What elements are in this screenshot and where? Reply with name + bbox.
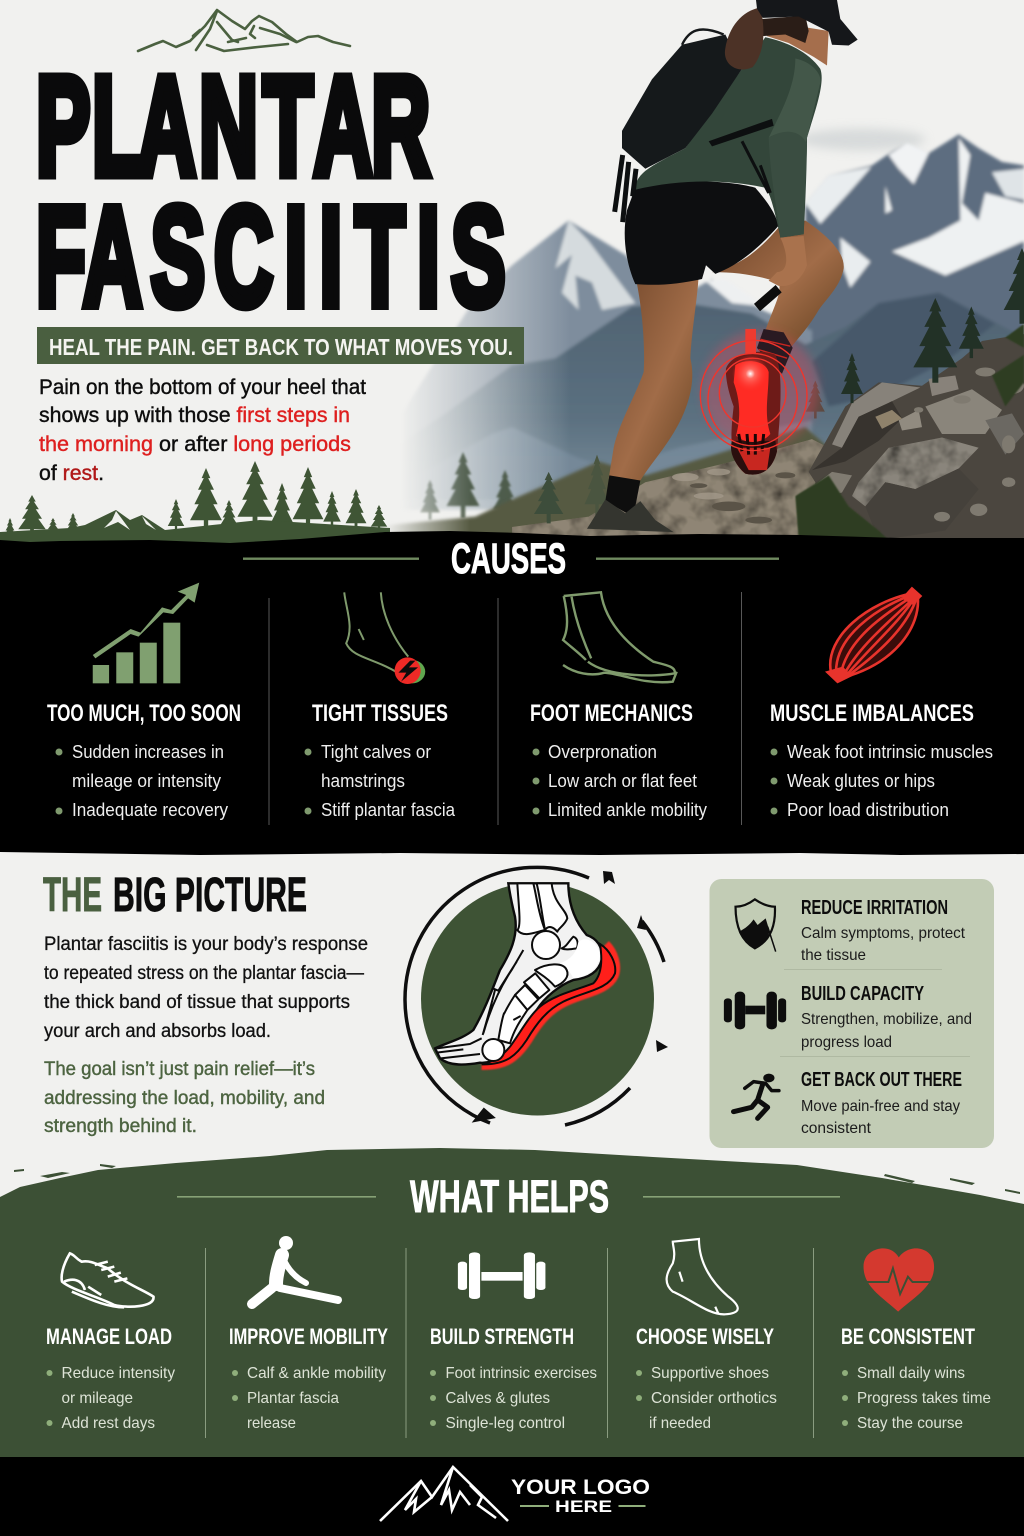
cause: too much, too soon: Sudden increases in (72, 742, 224, 762)
big picture description: the thick band of tissue that supports (44, 992, 350, 1013)
help: build strength: Calves & glutes (446, 1390, 550, 1407)
logo wordmark: HERE (555, 1497, 612, 1516)
help: be consistent: BE CONSISTENT (841, 1324, 975, 1349)
goals background (710, 879, 994, 1148)
footer background (0, 1457, 1024, 1536)
help: manage load: Reduce intensity (62, 1365, 175, 1382)
cause: muscle imbalances (770, 700, 993, 820)
column dividers (268, 592, 742, 825)
title: Plantar Fasciitis: FASCIITIS (36, 179, 506, 336)
help: manage load: or mileage (62, 1390, 133, 1407)
raised leg (712, 220, 844, 346)
hand and pole (757, 236, 807, 308)
heading rules (243, 558, 779, 560)
goal: build capacity: progress load (801, 1034, 892, 1051)
title: Plantar Fasciitis (36, 48, 506, 336)
big picture description: Plantar fasciitis is your body’s response (44, 934, 368, 955)
panel: the big picture (43, 867, 994, 1148)
icon: shield with mountain (736, 899, 776, 952)
help: be consistent: Small daily wins (857, 1365, 965, 1382)
cause: tight tissues (304, 700, 456, 820)
panel: goals (710, 879, 994, 1148)
tagline banner (37, 327, 524, 364)
goal statement: addressing the load, mobility, and (44, 1088, 325, 1109)
far scrub and trail (390, 426, 825, 533)
help: build strength: Single-leg control (446, 1415, 565, 1432)
intro paragraph: the morning or after long periods (39, 433, 351, 456)
big picture description: to repeated stress on the plantar fascia— (44, 963, 364, 984)
cause: too much, too soon: mileage or intensity (72, 771, 221, 791)
help: choose wisely: Supportive shoes (651, 1365, 769, 1382)
goal: reduce irritation: the tissue (801, 947, 866, 964)
big picture heading: THE (43, 869, 102, 922)
cause: foot mechanics: Overpronation (548, 742, 657, 762)
goal: get back out there: Move pain-free and stay (801, 1098, 960, 1115)
help: build strength: BUILD STRENGTH (430, 1324, 574, 1349)
goal: reduce irritation: Calm symptoms, protect (801, 925, 966, 942)
icon: foot with heel pain (344, 592, 425, 684)
logo wordmark: YOUR LOGO (511, 1476, 650, 1499)
logo wordmark (511, 1476, 650, 1516)
foot anatomy diagram (405, 867, 668, 1125)
distant mountains (369, 128, 1024, 510)
hiker (587, 0, 858, 532)
heading rules (177, 1196, 840, 1198)
cause: foot mechanics: FOOT MECHANICS (530, 700, 693, 727)
help: build strength (430, 1324, 597, 1432)
brush specks along hill edge (14, 1164, 1020, 1194)
goal: build capacity: BUILD CAPACITY (801, 982, 924, 1005)
long sleeve shirt (634, 37, 822, 238)
help: manage load (46, 1324, 175, 1432)
cause: too much, too soon (47, 700, 241, 820)
intro paragraph: shows up with those first steps in (39, 404, 350, 427)
cause: foot mechanics (530, 700, 707, 820)
icon: running shoe (62, 1253, 154, 1307)
footer (0, 1457, 1024, 1536)
help: choose wisely: if needed (649, 1415, 711, 1432)
big picture heading (43, 869, 307, 922)
heel pain highlight (700, 329, 819, 475)
icon: bare foot (667, 1239, 738, 1314)
help: manage load: MANAGE LOAD (46, 1324, 172, 1349)
cause: too much, too soon: Inadequate recovery (72, 800, 228, 820)
goal statement: strength behind it. (44, 1116, 197, 1137)
cause: muscle imbalances: Weak foot intrinsic muscles (787, 742, 993, 762)
icon: dumbbell (724, 992, 786, 1029)
black torn band (0, 531, 1024, 855)
cause: too much, too soon: TOO MUCH, TOO SOON (47, 700, 241, 727)
goal dividers (780, 969, 970, 1057)
causes heading: CAUSES (451, 535, 566, 583)
cause: tight tissues: hamstrings (321, 771, 405, 791)
column dividers (205, 1248, 814, 1438)
mountain logo above title (138, 10, 350, 51)
help: improve mobility (229, 1324, 388, 1432)
goal statement: The goal isn’t just pain relief—it’s (44, 1059, 315, 1080)
ground and rocks (369, 248, 1024, 540)
help: improve mobility: IMPROVE MOBILITY (229, 1324, 388, 1349)
backpack (615, 29, 774, 222)
standing sock and shoe (587, 475, 674, 532)
misty pines on the left (420, 452, 514, 520)
cause: muscle imbalances: Weak glutes or hips (787, 771, 935, 791)
help: be consistent: Stay the course (857, 1415, 963, 1432)
what helps heading: WHAT HELPS (410, 1171, 609, 1222)
panel: causes (0, 531, 1024, 855)
foot skeleton and inflamed fascia (435, 883, 615, 1065)
goal: get back out there (801, 1068, 962, 1137)
head and cap (725, 0, 858, 70)
title: Plantar Fasciitis: PLANTAR (36, 48, 430, 205)
goal statement (44, 1059, 325, 1137)
panel: what helps (0, 1148, 1024, 1458)
icon: runner (734, 1074, 779, 1118)
tagline banner: HEAL THE PAIN. GET BACK TO WHAT MOVES YOU. (49, 334, 513, 360)
goal: build capacity (801, 982, 972, 1051)
logo accent rules (520, 1505, 646, 1507)
help: build strength: Foot intrinsic exercises (446, 1365, 597, 1382)
cause: tight tissues: Tight calves or (321, 742, 431, 762)
green circle (421, 882, 654, 1116)
help: choose wisely (636, 1324, 777, 1432)
icon: heart with pulse (864, 1248, 934, 1312)
shorts (625, 181, 779, 285)
icon: foot mechanics boot (563, 592, 677, 682)
goal: reduce irritation (801, 896, 966, 964)
cycle arrows (405, 867, 668, 1125)
help: be consistent: Progress takes time (857, 1390, 991, 1407)
forest and mountain silhouette (0, 461, 390, 545)
cause: muscle imbalances: Poor load distribution (787, 800, 949, 820)
cause: tight tissues: Stiff plantar fascia (321, 800, 456, 820)
icon: muscle fibres (825, 587, 922, 683)
goal: build capacity: Strengthen, mobilize, and (801, 1011, 972, 1028)
help: manage load: Add rest days (62, 1415, 155, 1432)
intro paragraph (39, 376, 366, 485)
help: improve mobility: Plantar fascia (247, 1390, 339, 1407)
big picture description (44, 934, 368, 1042)
icon: dumbbell (458, 1252, 545, 1299)
goal: get back out there: consistent (801, 1120, 872, 1137)
big picture heading: BIG PICTURE (113, 869, 307, 922)
icon: stretching figure (252, 1236, 338, 1304)
icon: rising bar chart (93, 583, 199, 683)
cause: foot mechanics: Low arch or flat feet (548, 771, 697, 791)
logo mountains (380, 1467, 508, 1521)
big picture description: your arch and absorbs load. (44, 1021, 271, 1042)
green hill band (0, 1148, 1024, 1458)
standing leg (609, 276, 699, 480)
cause: tight tissues: TIGHT TISSUES (312, 700, 448, 727)
help: improve mobility: Calf & ankle mobility (247, 1365, 386, 1382)
intro paragraph: Pain on the bottom of your heel that (39, 376, 366, 399)
help: choose wisely: CHOOSE WISELY (636, 1324, 774, 1349)
help: be consistent (841, 1324, 991, 1432)
intro paragraph: of rest. (39, 462, 104, 485)
help: improve mobility: release (247, 1415, 296, 1432)
hero photo: hiker on mountain trail (369, 0, 1024, 540)
help: choose wisely: Consider orthotics (651, 1390, 777, 1407)
goal: reduce irritation: REDUCE IRRITATION (801, 896, 948, 919)
cause: foot mechanics: Limited ankle mobility (548, 800, 707, 820)
